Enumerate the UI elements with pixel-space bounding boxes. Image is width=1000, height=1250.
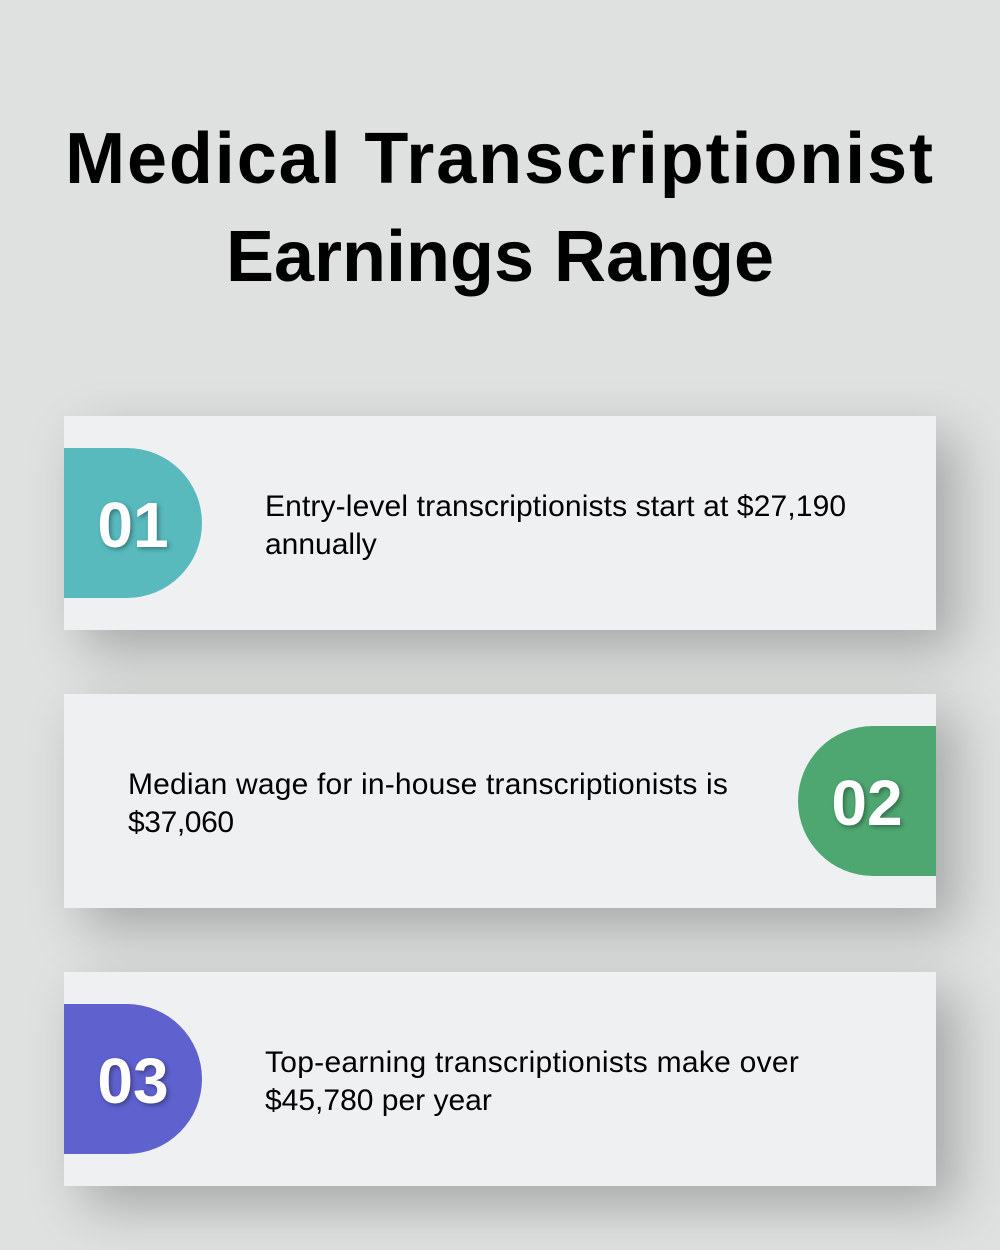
panel: top earners [64, 972, 936, 1186]
badge 02: 02 [831, 767, 903, 839]
text: median wage [128, 768, 728, 839]
badge 03: 03 [97, 1045, 169, 1117]
text: entry-level [265, 490, 846, 561]
text: median wage: Median wage for in-house transcriptionists is [128, 768, 728, 801]
text: top earners: $45,780 per year [265, 1084, 492, 1117]
badge 01: 01 [97, 489, 169, 561]
badge 02 [798, 726, 936, 876]
text: top earners: Top-earning transcriptionists make over [265, 1046, 799, 1079]
text: entry-level: Entry-level transcriptionists start at $27,190 [265, 490, 846, 523]
text: top earners [265, 1046, 799, 1117]
title: Medical Transcriptionist [65, 119, 935, 199]
badge 03 [64, 1004, 202, 1154]
title: Earnings Range [226, 217, 774, 297]
title [65, 119, 935, 297]
panel: median wage [64, 694, 936, 908]
panel: entry-level [64, 416, 936, 630]
text: median wage: $37,060 [128, 806, 234, 839]
badge 01 [64, 448, 202, 598]
text: entry-level: annually [265, 528, 377, 561]
